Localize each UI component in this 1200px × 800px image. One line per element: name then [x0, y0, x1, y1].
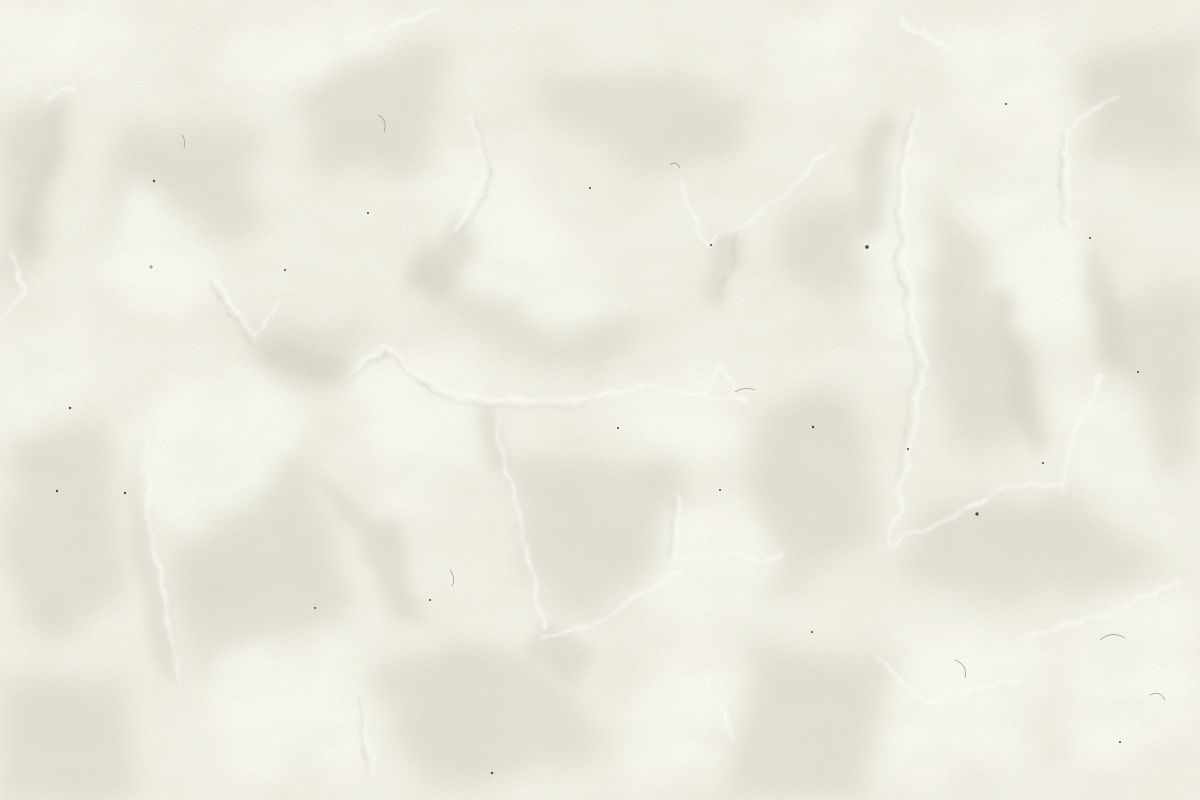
- paper specks and fibres: [56, 103, 1139, 774]
